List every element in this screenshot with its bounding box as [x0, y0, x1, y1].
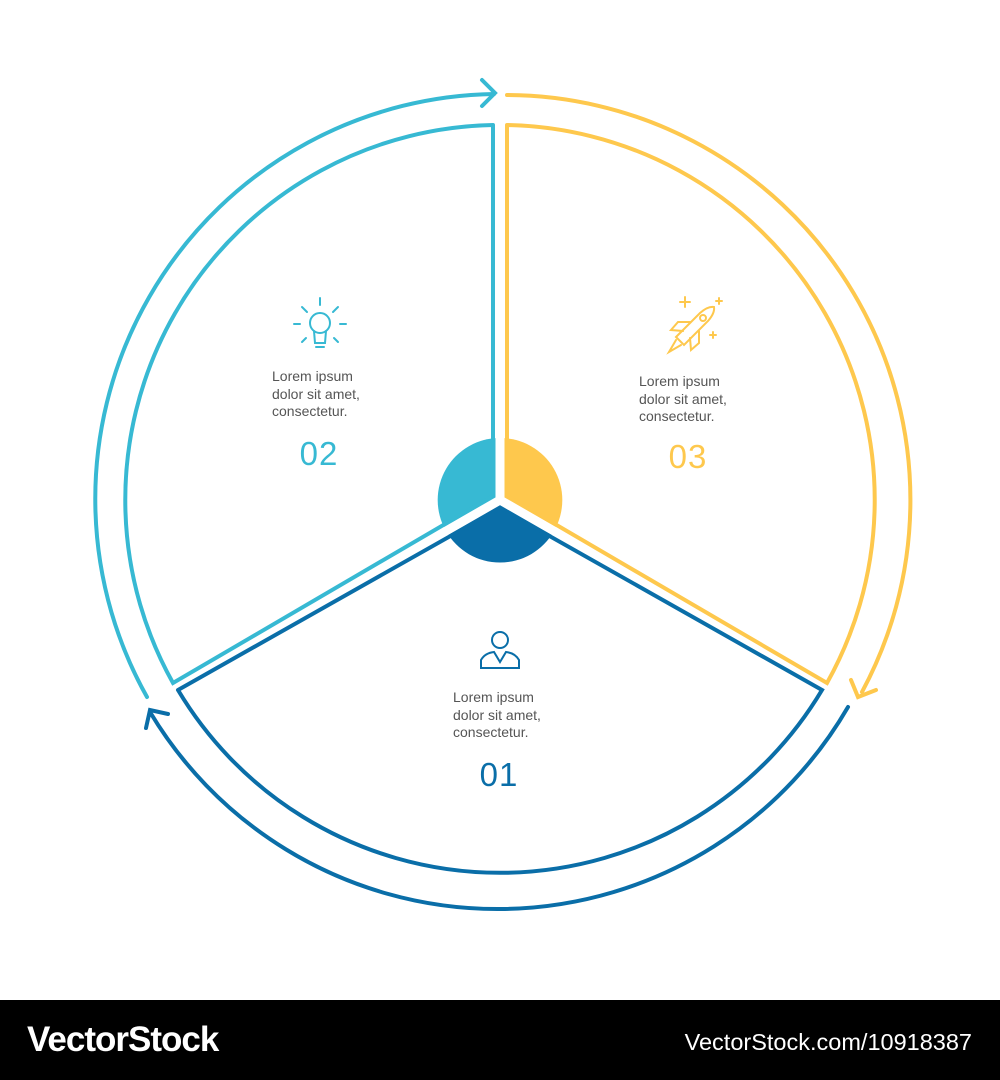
icon: person: [481, 632, 519, 668]
footer bar: [0, 1000, 1000, 1080]
footer logo: VectorStock: [27, 1020, 218, 1059]
text 02: Lorem ipsum: [272, 368, 353, 384]
text 02: [272, 368, 360, 419]
footer url: VectorStock.com/10918387: [685, 1029, 972, 1055]
text 03: [639, 373, 727, 424]
text 01: consectetur.: [453, 724, 528, 740]
text 01: [453, 689, 541, 740]
number 02: 02: [300, 435, 338, 472]
arrow: yellow: [507, 95, 910, 697]
arrow: dark blue: [146, 707, 848, 909]
text 03: consectetur.: [639, 408, 714, 424]
center hub: [380, 380, 620, 569]
sector 02 outline: [125, 125, 493, 683]
text 02: consectetur.: [272, 403, 348, 419]
text 02: dolor sit amet,: [272, 386, 360, 402]
sector 03 outline: [507, 125, 875, 683]
icon: rocket: [669, 297, 722, 352]
number 03: 03: [669, 438, 707, 475]
icon: lightbulb: [294, 298, 346, 347]
text 01: Lorem ipsum: [453, 689, 534, 705]
text 01: dolor sit amet,: [453, 706, 541, 722]
number 01: 01: [480, 756, 518, 793]
sector 01 outline: [178, 508, 822, 873]
arrow: light blue: [95, 80, 495, 697]
text 03: Lorem ipsum: [639, 373, 720, 389]
text 03: dolor sit amet,: [639, 390, 727, 406]
